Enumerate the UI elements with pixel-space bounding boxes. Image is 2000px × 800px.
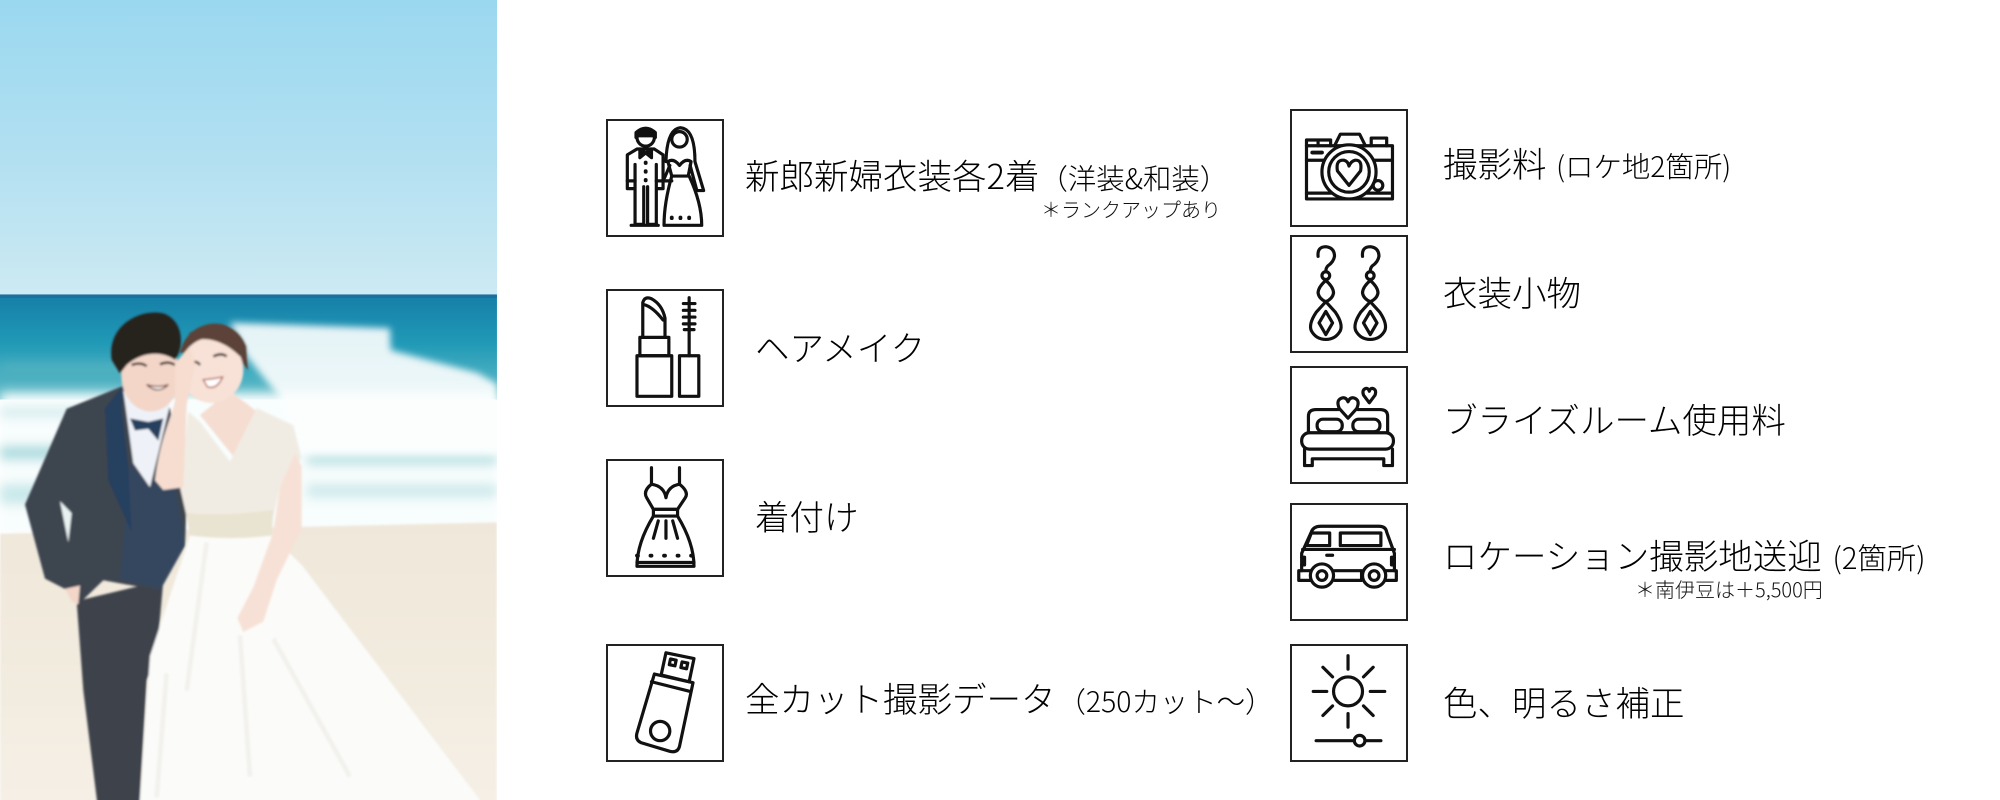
label: costume accessories: 衣装小物 — [1443, 266, 1581, 316]
label: location transfer: ロケーション撮影地送迎 (2箇所) — [1443, 529, 1925, 579]
icon box: bride and groom — [606, 119, 724, 237]
label: hair and makeup: ヘアメイク — [755, 321, 925, 371]
icon box: brightness adjustment — [1290, 644, 1408, 762]
bow tie — [130, 418, 163, 441]
groom trousers — [77, 580, 163, 800]
sash — [186, 510, 273, 538]
groom hand — [65, 585, 80, 604]
note: Minami-Izu surcharge: ＊南伊豆は＋5,500円 — [1635, 574, 1823, 603]
icon box: usb memory — [606, 644, 724, 762]
bride arms — [155, 346, 195, 490]
icon box: van — [1290, 503, 1408, 621]
groom head — [121, 339, 180, 412]
icon box: earrings — [1290, 235, 1408, 353]
icon box: bed with hearts — [1290, 366, 1408, 484]
bride dress bodice — [180, 408, 302, 517]
label: groom and bride costumes: 新郎新婦衣装各2着（洋装&和装） — [745, 149, 1228, 199]
icon box: camera — [1290, 109, 1408, 227]
bride skirt — [138, 536, 490, 800]
bride hair and neck — [180, 323, 248, 370]
note: rank up available: ＊ランクアップあり — [1041, 194, 1221, 223]
icon box: lipstick and mascara — [606, 289, 724, 407]
label: colour and brightness correction: 色、明るさ補正 — [1443, 676, 1684, 726]
photo: bride and groom on the beach — [0, 0, 497, 800]
icon box: dress — [606, 459, 724, 577]
label: bride room fee: ブライズルーム使用料 — [1443, 393, 1786, 443]
label: dressing: 着付け — [755, 490, 858, 540]
veil — [230, 323, 497, 453]
shirt and vest — [123, 391, 170, 487]
label: all cut photo data: 全カット撮影データ（250カット～） — [745, 672, 1273, 722]
groom jacket — [25, 386, 187, 604]
label: photography fee: 撮影料 (ロケ地2箇所) — [1443, 137, 1731, 187]
